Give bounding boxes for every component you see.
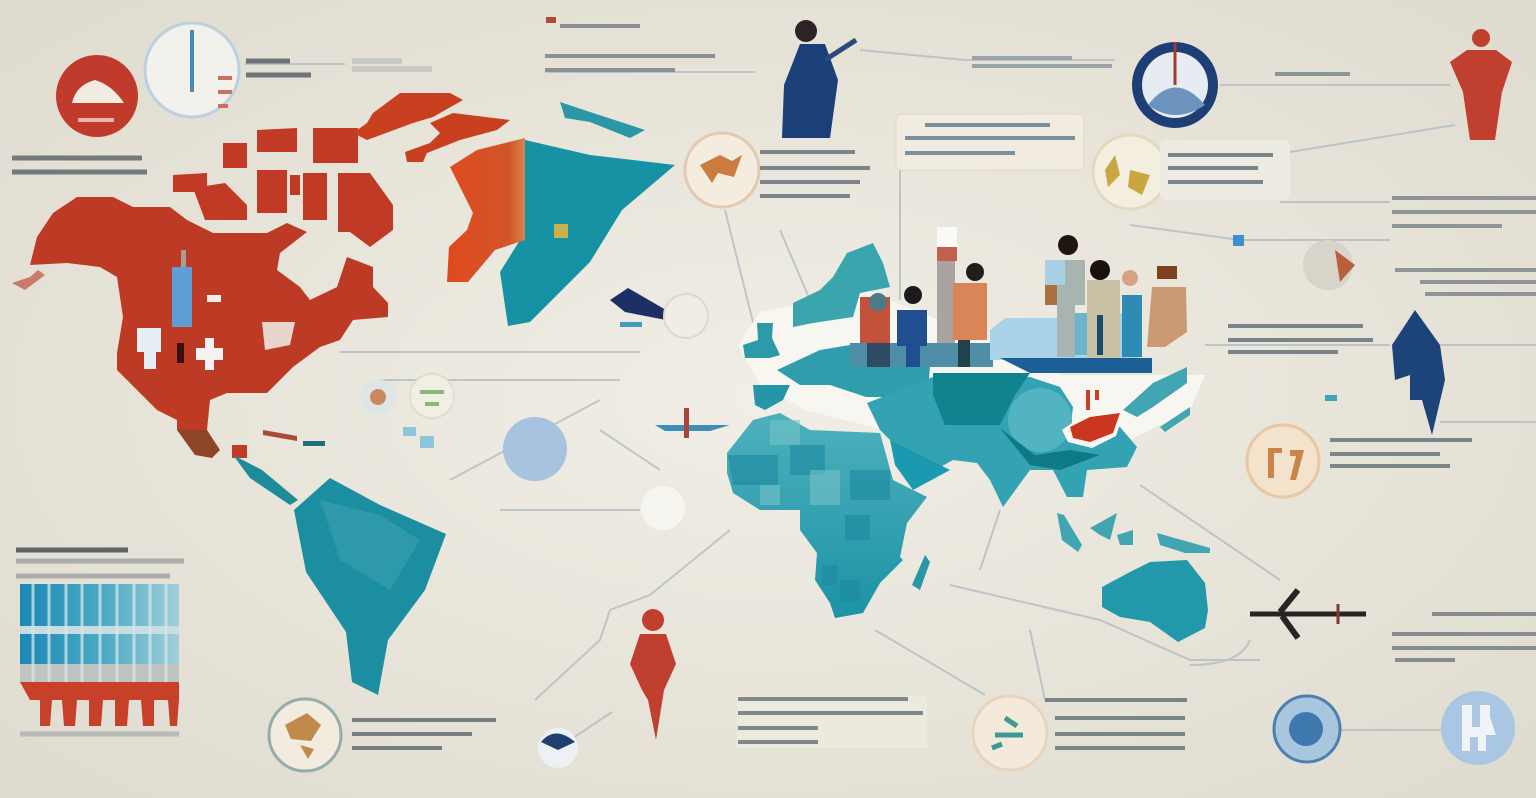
icon: small flag marker: [655, 408, 730, 438]
continent: [727, 413, 927, 618]
cloud: [72, 80, 124, 103]
person: navy tall figure: [1392, 310, 1445, 435]
person: red vest: [860, 293, 890, 367]
icon: people badge: [1441, 691, 1515, 765]
bar separators: [33, 584, 166, 682]
map: North America: [12, 93, 510, 458]
red heart marker: [1062, 390, 1125, 448]
person: blue shirt: [1045, 235, 1085, 357]
callout: bottom left globe: [269, 699, 496, 771]
person: red figure top right: [1450, 29, 1512, 140]
dark platform: [1000, 358, 1152, 373]
dark teal strip: [303, 441, 325, 446]
person: tall grey: [937, 227, 957, 343]
Alaska dots: [12, 270, 45, 290]
grey row: [20, 664, 179, 682]
icon: blue sphere: [503, 417, 567, 481]
icon: blue circle bottom right: [1274, 696, 1340, 762]
yellow marker: [554, 224, 568, 238]
callout: bottom right center: [973, 696, 1187, 770]
icon: small globe pair: [360, 374, 454, 418]
text block: top center: [545, 20, 715, 70]
text block: top label: [352, 61, 432, 69]
Scandinavia: [793, 243, 890, 327]
callout: right upper: [1093, 135, 1290, 209]
halo: white behind Europe: [738, 285, 1205, 440]
British isles: [743, 323, 780, 358]
icon: navy globe: [1132, 42, 1218, 128]
Iberia: [753, 385, 790, 410]
map: Greenland: [447, 138, 675, 326]
great lakes: [262, 322, 295, 350]
icon: white cloud: [641, 486, 685, 530]
icon: small white mark: [207, 295, 221, 302]
text block: right 1: [1392, 198, 1536, 226]
icon: dark marker: [177, 343, 184, 363]
map: Australia: [1102, 560, 1208, 642]
connector lines: [245, 50, 1536, 740]
icon: white cross: [196, 338, 223, 370]
icon: red cloud badge: [56, 55, 138, 137]
icon: blue node: [1233, 235, 1244, 246]
person: navy robe figure: [782, 20, 856, 138]
arctic islands: [173, 128, 393, 247]
map: Madagascar: [912, 555, 930, 590]
mainland: [30, 197, 388, 430]
icon: clock dial top-left: [145, 23, 239, 117]
footer line: [20, 732, 179, 736]
text block: right lower: [1392, 614, 1536, 660]
chart: people pictogram grid: [16, 550, 184, 734]
callout: top center left: [685, 133, 870, 207]
icon: airplane: [1250, 590, 1366, 638]
map: Central America: [233, 455, 298, 505]
text block: right center: [1228, 326, 1373, 352]
person: white shirt: [1087, 260, 1120, 358]
Himalaya dark: [1000, 428, 1100, 470]
red strip: [263, 430, 297, 441]
blue marks: [403, 427, 434, 448]
circle: [56, 55, 138, 137]
map: Japan and islands: [1057, 367, 1337, 553]
Mexico tip: [177, 430, 220, 458]
Asia: [867, 377, 1137, 507]
country patches: [728, 445, 890, 602]
title lines: [16, 548, 128, 552]
Central Asia dark: [933, 373, 1030, 425]
continent: [294, 478, 446, 695]
callout: top center box: [896, 114, 1084, 170]
icon: small navy dial: [538, 728, 578, 768]
text block: top-left label: [246, 61, 311, 75]
people group: [850, 227, 1187, 373]
Europe band: [777, 345, 992, 397]
callout: right clock: [1247, 425, 1472, 497]
icon: white badge: [137, 328, 161, 369]
blue rows: [20, 584, 179, 670]
map: South America: [294, 478, 446, 695]
person: orange: [953, 263, 987, 367]
text block: right 2: [1395, 270, 1536, 294]
ground band: [850, 343, 993, 367]
Siberia circle: [1008, 388, 1072, 452]
Cuba red: [232, 445, 247, 458]
person: brown: [1147, 266, 1187, 347]
person: teal: [1122, 270, 1142, 357]
icon: tower: [172, 250, 192, 327]
icon: grey fist: [1303, 240, 1355, 290]
teal side: [500, 140, 675, 326]
text block: bottom center: [737, 696, 927, 748]
land shading: [320, 500, 420, 590]
map: arctic teal island: [560, 102, 645, 138]
icon: navy aircraft: [610, 288, 708, 338]
map: Africa: [727, 413, 927, 618]
map: Eurasia: [743, 243, 1137, 507]
Arabia: [890, 440, 950, 490]
light blue shape behind: [1075, 313, 1105, 355]
map: Caribbean marks: [263, 427, 434, 448]
text block: far-left label: [12, 158, 147, 172]
text block: top right center: [972, 58, 1112, 66]
red row: [20, 682, 179, 726]
person: red standing figure: [630, 609, 676, 740]
light platform: [990, 313, 1140, 360]
person: navy suit: [897, 286, 927, 367]
north islands: [353, 93, 510, 162]
text block: top right: [1275, 72, 1350, 76]
map: Canada landmarks and icons: [137, 250, 223, 370]
row divider: [20, 626, 179, 634]
orange side: [447, 138, 525, 282]
